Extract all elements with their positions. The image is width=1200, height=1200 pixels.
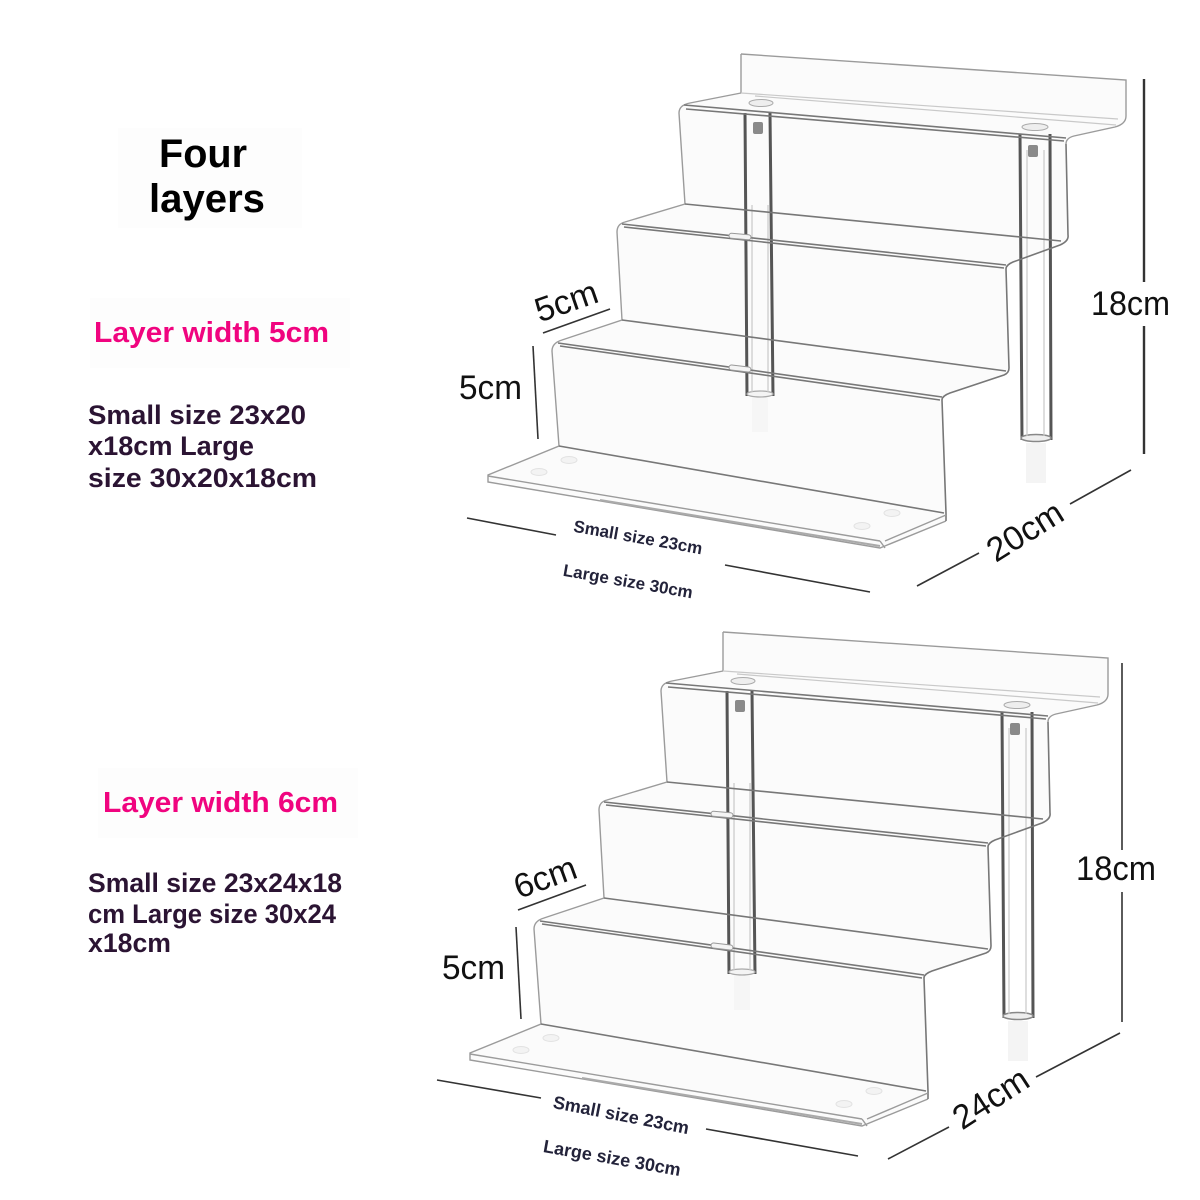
support posts	[727, 678, 1033, 1061]
dimension: height 18cm: 18cm	[1076, 850, 1156, 888]
text block: sizes for 5cm layer: Small size 23x20	[88, 400, 306, 430]
dimension: step height 5cm: 5cm	[459, 369, 522, 407]
dimension: depth 24cm	[888, 1033, 1120, 1159]
steps	[488, 93, 1068, 548]
text block: sizes for 5cm layer: x18cm Large	[88, 431, 254, 461]
acrylic stand: 5cm layer	[488, 54, 1126, 548]
text block: sizes for 6cm layer: Small size 23x24x18	[88, 868, 342, 898]
dimension: width small and large	[437, 1080, 858, 1180]
dimension: step depth 5cm: 5cm	[530, 273, 603, 330]
text block: sizes for 5cm layer: size 30x20x18cm	[88, 463, 317, 493]
dimension: width small and large: Large size 30cm	[562, 561, 694, 602]
heading: layer width 6cm	[98, 768, 358, 838]
dimension: width small and large: Small size 23cm	[551, 1092, 691, 1138]
text block: sizes for 6cm layer	[88, 868, 342, 958]
text block: sizes for 6cm layer: x18cm	[88, 928, 171, 958]
steps	[470, 671, 1050, 1126]
support posts	[745, 100, 1051, 483]
dimension: step depth 6cm: 6cm	[509, 849, 582, 907]
dimension: width small and large: Small size 23cm	[572, 517, 704, 558]
dimension: height 18cm: 18cm	[1091, 285, 1170, 323]
heading: layer width 5cm: Layer width 5cm	[94, 317, 329, 349]
text block: sizes for 5cm layer	[88, 400, 317, 493]
dimension: depth 20cm	[917, 470, 1131, 586]
dimension: width small and large: Large size 30cm	[542, 1136, 682, 1180]
dimension: step height 5cm: 5cm	[442, 949, 505, 987]
acrylic stand: 6cm layer	[470, 632, 1108, 1126]
title: four layers: layers	[149, 177, 265, 221]
title: four layers: Four	[159, 132, 247, 176]
heading: layer width 6cm: Layer width 6cm	[103, 787, 338, 819]
dimension: width small and large	[467, 517, 870, 602]
dimensions: 5cm layer stand	[459, 79, 1170, 602]
dimension: depth 24cm: 24cm	[946, 1060, 1036, 1137]
heading: layer width 5cm	[90, 298, 350, 368]
title: four layers	[118, 128, 302, 228]
dimension: depth 20cm: 20cm	[980, 494, 1070, 570]
text block: sizes for 6cm layer: cm Large size 30x24	[88, 899, 336, 929]
dimension: step height 5cm	[459, 346, 538, 439]
dimensions: 6cm layer stand	[437, 663, 1156, 1180]
dimension: step height 5cm	[442, 927, 521, 1019]
